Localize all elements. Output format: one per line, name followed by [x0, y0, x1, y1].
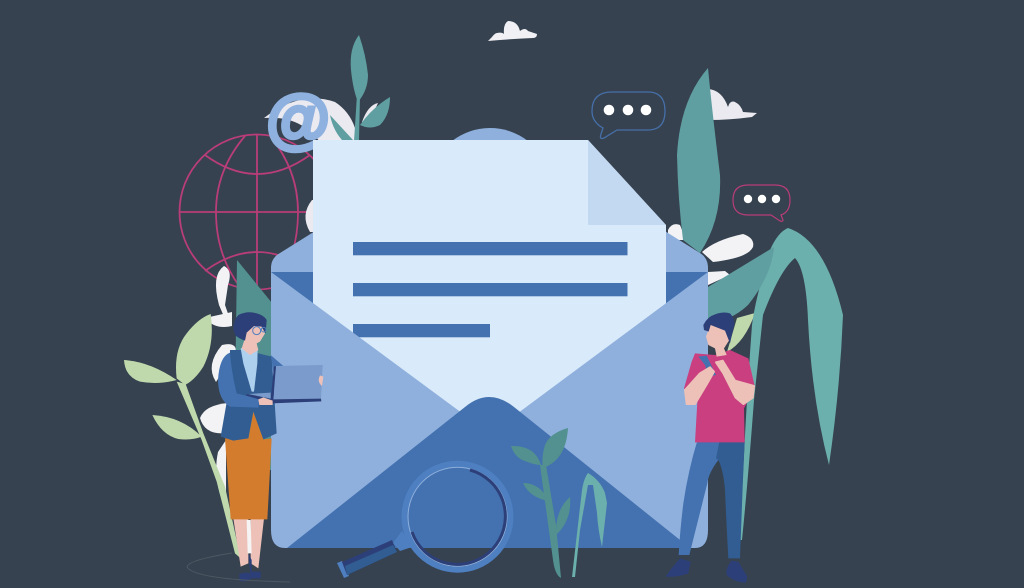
right forearm: [716, 361, 754, 404]
icon: cloud top: [488, 21, 537, 41]
envelope bottom flap: [287, 397, 690, 548]
far sleeve: [271, 355, 283, 372]
plant: top teal sprig: [330, 35, 390, 141]
plant: small teal sprig: [511, 428, 570, 578]
envelope front right: [510, 272, 708, 548]
plant: small arching leaf: [572, 473, 607, 577]
hands: [258, 397, 273, 405]
shoes: [239, 573, 251, 581]
glasses: [253, 327, 266, 335]
icon: magnifying glass: [337, 464, 510, 578]
near sleeve: [218, 353, 259, 408]
laptop: [246, 365, 323, 403]
envelope front left: [271, 272, 470, 548]
text line 1: [353, 242, 628, 255]
text line 2: [353, 283, 628, 296]
icon: chat bubble pink: [733, 185, 790, 221]
plant: dark teal leaf right: [708, 247, 774, 322]
text line 3: [353, 324, 490, 337]
far pant leg: [716, 442, 745, 558]
jacket: [221, 350, 277, 441]
paper: [313, 140, 666, 440]
figure: woman with laptop: [124, 312, 323, 581]
plant: green plant stem and leaves: [124, 314, 241, 558]
neck and face: [242, 323, 265, 355]
plant: dark teal leaf behind woman: [234, 260, 272, 470]
phone: [698, 356, 716, 377]
envelope semicircle: [452, 128, 528, 141]
legs: [233, 518, 248, 567]
plant: white leaves left of envelope: [200, 98, 378, 510]
plant: arching teal leaf: [740, 228, 843, 540]
figure: man with phone: [666, 313, 755, 583]
shoes: [666, 558, 691, 577]
plant: right tall leaf and white leaves: [668, 68, 757, 352]
icon: globe: [179, 134, 335, 290]
ground ellipse: [187, 553, 290, 582]
shirt: [241, 346, 258, 392]
icon: chat bubble blue: [592, 92, 665, 138]
hair: [703, 313, 734, 343]
envelope inner band: [271, 272, 708, 340]
envelope back flap: [271, 228, 708, 300]
shirt: [684, 350, 755, 442]
hair: [233, 312, 267, 341]
near pant leg: [679, 441, 720, 555]
envelope: [271, 128, 708, 548]
skirt: [225, 412, 272, 519]
paper fold: [588, 140, 666, 225]
left forearm: [685, 367, 714, 404]
icon: at sign: @: [266, 81, 330, 155]
neck and face: [706, 322, 729, 357]
